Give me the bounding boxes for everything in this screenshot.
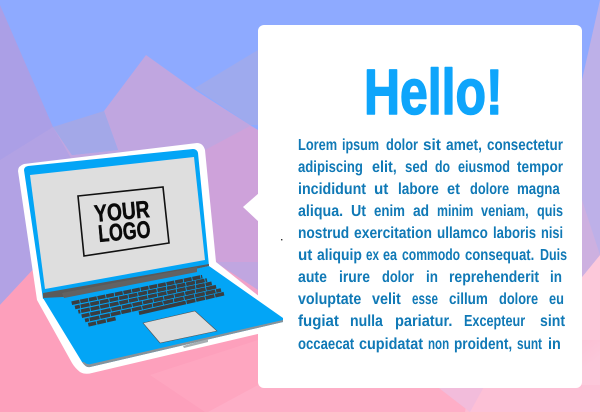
base edge xyxy=(82,320,283,367)
white sticker outline xyxy=(18,143,285,374)
latch xyxy=(183,339,208,348)
body text: labore xyxy=(398,181,439,198)
body text: dolor xyxy=(386,137,418,154)
logo text: YOUR xyxy=(93,195,151,227)
body text: aliqua. xyxy=(298,203,343,220)
body text: fugiat xyxy=(298,313,340,330)
body text: tempor xyxy=(517,159,563,176)
body text: in xyxy=(550,269,562,286)
body text: magna xyxy=(517,181,560,198)
keyboard xyxy=(72,277,226,325)
body text: enim xyxy=(374,203,405,220)
body text: ipsum xyxy=(342,137,379,154)
laptop base xyxy=(43,266,283,367)
logo placeholder xyxy=(78,187,169,256)
body text: exercitation xyxy=(354,225,432,242)
body text: sed xyxy=(405,159,428,176)
card panel xyxy=(258,25,582,388)
body text: commodo xyxy=(402,247,460,264)
body text: irure xyxy=(339,269,370,286)
body text: dolore xyxy=(470,181,509,198)
body text: cupidatat xyxy=(359,336,424,353)
trackpad xyxy=(143,311,217,343)
body text: consectetur xyxy=(487,137,563,154)
body text: in xyxy=(426,269,438,286)
body text: dolore xyxy=(499,291,538,308)
small dot xyxy=(281,239,282,240)
body text: ut xyxy=(298,247,313,264)
body text: voluptate xyxy=(298,291,361,308)
body text: velit xyxy=(372,291,401,308)
body text: nisi xyxy=(541,225,563,242)
logo text xyxy=(93,195,152,248)
body text: adipiscing xyxy=(298,159,363,176)
logo text: LOGO xyxy=(97,217,152,248)
body text: laboris xyxy=(493,225,536,242)
body text: consequat. xyxy=(465,247,534,264)
speech tail xyxy=(243,193,259,222)
body text: aute xyxy=(298,269,327,286)
body text: incididunt xyxy=(298,181,367,198)
body text: ad xyxy=(413,203,429,220)
body text: do xyxy=(435,159,450,176)
body text: aliquip xyxy=(317,247,362,264)
body text: elit, xyxy=(372,159,397,176)
body text: eiusmod xyxy=(458,159,510,176)
body text: in xyxy=(548,336,561,353)
title: Hello! xyxy=(364,57,503,128)
body text: Duis xyxy=(540,247,567,264)
body text: quis xyxy=(537,203,563,220)
body text: reprehenderit xyxy=(449,269,540,286)
body text: minim xyxy=(437,203,473,220)
body text: non xyxy=(428,336,449,353)
body text: Ut xyxy=(351,203,367,220)
body text: nostrud xyxy=(298,225,349,242)
body text: amet, xyxy=(446,137,482,154)
body text: pariatur. xyxy=(395,313,452,330)
laptop lid xyxy=(24,149,209,299)
body text: esse xyxy=(412,291,438,308)
body text: occaecat xyxy=(298,336,355,353)
body text: et xyxy=(447,181,461,198)
body text xyxy=(298,137,567,353)
body text: sit xyxy=(423,137,442,154)
body text: Excepteur xyxy=(464,313,525,330)
body text: ex xyxy=(366,247,379,264)
body text: cillum xyxy=(449,291,488,308)
body text: ea xyxy=(383,247,397,264)
body text: proident, xyxy=(454,336,512,353)
body text: Lorem xyxy=(298,137,337,154)
body text: veniam, xyxy=(481,203,529,220)
body text: ullamco xyxy=(437,225,488,242)
body text: eu xyxy=(549,291,564,308)
body text: nulla xyxy=(350,313,383,330)
body text: sint xyxy=(540,313,566,330)
speech card xyxy=(243,25,582,388)
body text: dolor xyxy=(382,269,414,286)
body text: ut xyxy=(374,181,389,198)
laptop screen xyxy=(30,157,205,289)
body text: sunt xyxy=(517,336,542,353)
hinge xyxy=(43,264,209,298)
laptop sticker xyxy=(18,143,285,374)
